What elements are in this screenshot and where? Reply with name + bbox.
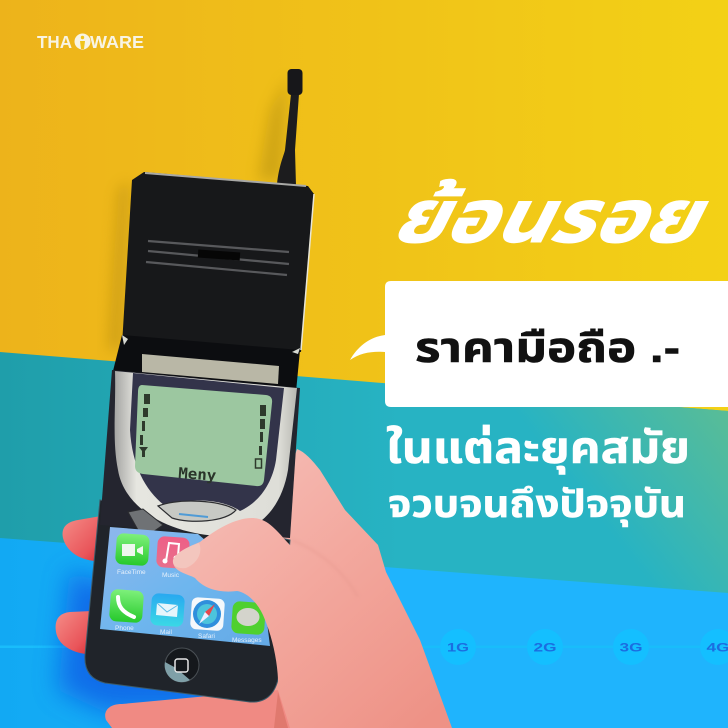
phone: iPhone body [85,500,290,702]
logo: Thaiware: WARE [90,32,144,52]
phone: iPhone screen [100,527,270,646]
phone: home button [165,648,199,682]
timeline: network generations [0,629,728,665]
cover: speaker slots [146,241,289,275]
subtitle: line two: จวบจนถึงปัจจุบัน [388,484,686,527]
logo: Thaiware [37,32,144,52]
app: Safari: Safari [198,633,215,640]
title: script heading: ย้อนรอย [387,175,714,258]
hand: middle finger [56,611,92,654]
app: FaceTime: FaceTime [117,569,146,576]
phone: flip cover [112,172,314,392]
nokia: silver frame [115,371,297,536]
background: yellow band [0,0,728,420]
nokia: dark faceplate [130,373,284,511]
logo: Thaiware: THA [37,32,72,52]
node: 2G: 2G [534,642,557,654]
hand: knuckle crease [292,540,358,597]
app: FaceTime [115,533,150,576]
phone: antenna [277,69,302,186]
illustration: hand and phones [56,69,452,728]
node: 1G [440,629,476,665]
node: 1G: 1G [447,642,469,654]
app: Mail: Mail [160,629,172,636]
background: teal band [0,352,728,600]
hand: top finger [63,516,104,561]
nokia: navigation key [158,501,236,521]
LCD text: Meny [178,464,217,485]
node: 4G [700,629,728,665]
hand: shadow beside phone base [274,692,288,728]
app: Phone: Phone [115,625,134,632]
cover: hinge shadow [112,335,300,392]
nokia: LCD screen [135,385,272,486]
node: 3G [613,629,649,665]
app: Music [156,536,190,579]
subtitle: line one: ในแต่ละยุคสมัย [386,424,690,475]
app: Safari [190,597,225,640]
app: Phone [109,589,144,632]
app: Messages: Messages [232,637,262,644]
node: 3G: 3G [620,642,643,654]
app: Mail [150,593,185,636]
callout text: ราคามือถือ .- [415,324,680,371]
phone: Nokia body [100,370,300,538]
hand: thumbnail [173,543,200,568]
background: blue band [0,538,728,728]
hand: bottom finger [105,690,290,728]
shadows behind phones [58,75,288,712]
nokia: side key [128,509,163,534]
callout: speech bubble [350,281,728,407]
hand: thumb [173,518,400,728]
app: Music: Music [162,572,180,579]
node: 4G: 4G [706,642,728,654]
node: 2G [527,629,563,665]
app: Messages [231,601,266,644]
hand: palm and wrist [262,449,452,728]
